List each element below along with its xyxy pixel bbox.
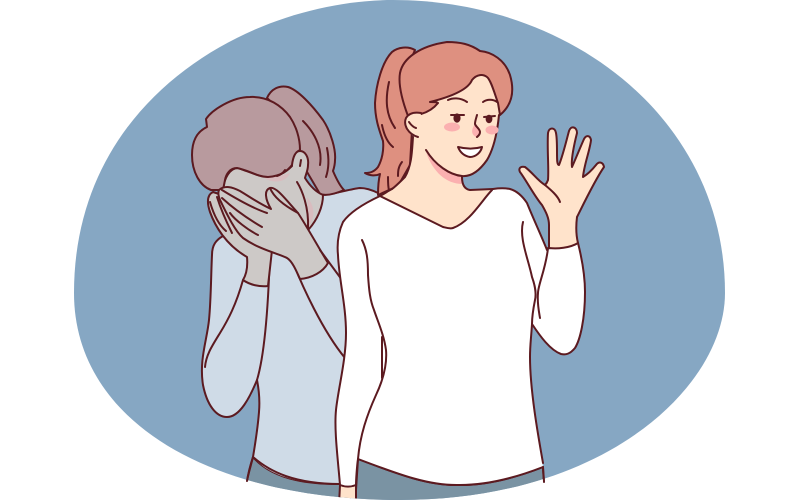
back woman: jaw line (297, 182, 308, 228)
front woman: ear (405, 113, 421, 137)
back woman: left hand behind (208, 192, 272, 286)
back woman: ponytail strands (303, 121, 328, 177)
front woman: eyebrows (448, 98, 497, 102)
back woman: wrist line (320, 250, 342, 280)
front woman: bare leg strip (339, 485, 356, 500)
back woman: cheek shade (263, 173, 313, 226)
back woman covering her face (192, 86, 378, 500)
front woman: ponytail strands (382, 82, 402, 190)
back woman: sweater (202, 188, 378, 484)
front woman: face, neck and jaw lines (392, 115, 499, 190)
back woman: ponytail (267, 86, 344, 195)
front woman: smiling mouth (458, 147, 482, 157)
back woman: right hand (218, 187, 328, 279)
front woman: eyes (451, 113, 495, 123)
front woman waving (335, 42, 604, 500)
back woman: finger lines (210, 188, 298, 235)
front woman: hair (399, 42, 512, 116)
back woman: head hair (192, 97, 300, 190)
front woman: sweater fill (335, 188, 585, 486)
front woman: arm fold (381, 337, 383, 378)
front woman: inner ear (409, 122, 416, 128)
front woman: pants (355, 459, 545, 500)
front woman: blush (444, 122, 498, 134)
back woman: pants (245, 457, 350, 500)
back woman: body and arm outlines (202, 188, 378, 484)
front woman: ponytail (365, 48, 415, 195)
front woman: waving hand (519, 127, 604, 248)
back woman: face and neck (223, 151, 323, 240)
front woman: neck and face (380, 70, 500, 228)
back woman: hair fold near ear (277, 170, 285, 176)
front woman: nose fill (472, 124, 480, 137)
front woman: neck shadow (426, 152, 463, 184)
front woman: palm crease (545, 185, 560, 202)
back woman: ear detail (300, 160, 301, 166)
front woman: left arm inner line (358, 240, 386, 459)
front woman: sweater outlines (335, 188, 585, 486)
front woman: nose line (475, 115, 480, 137)
